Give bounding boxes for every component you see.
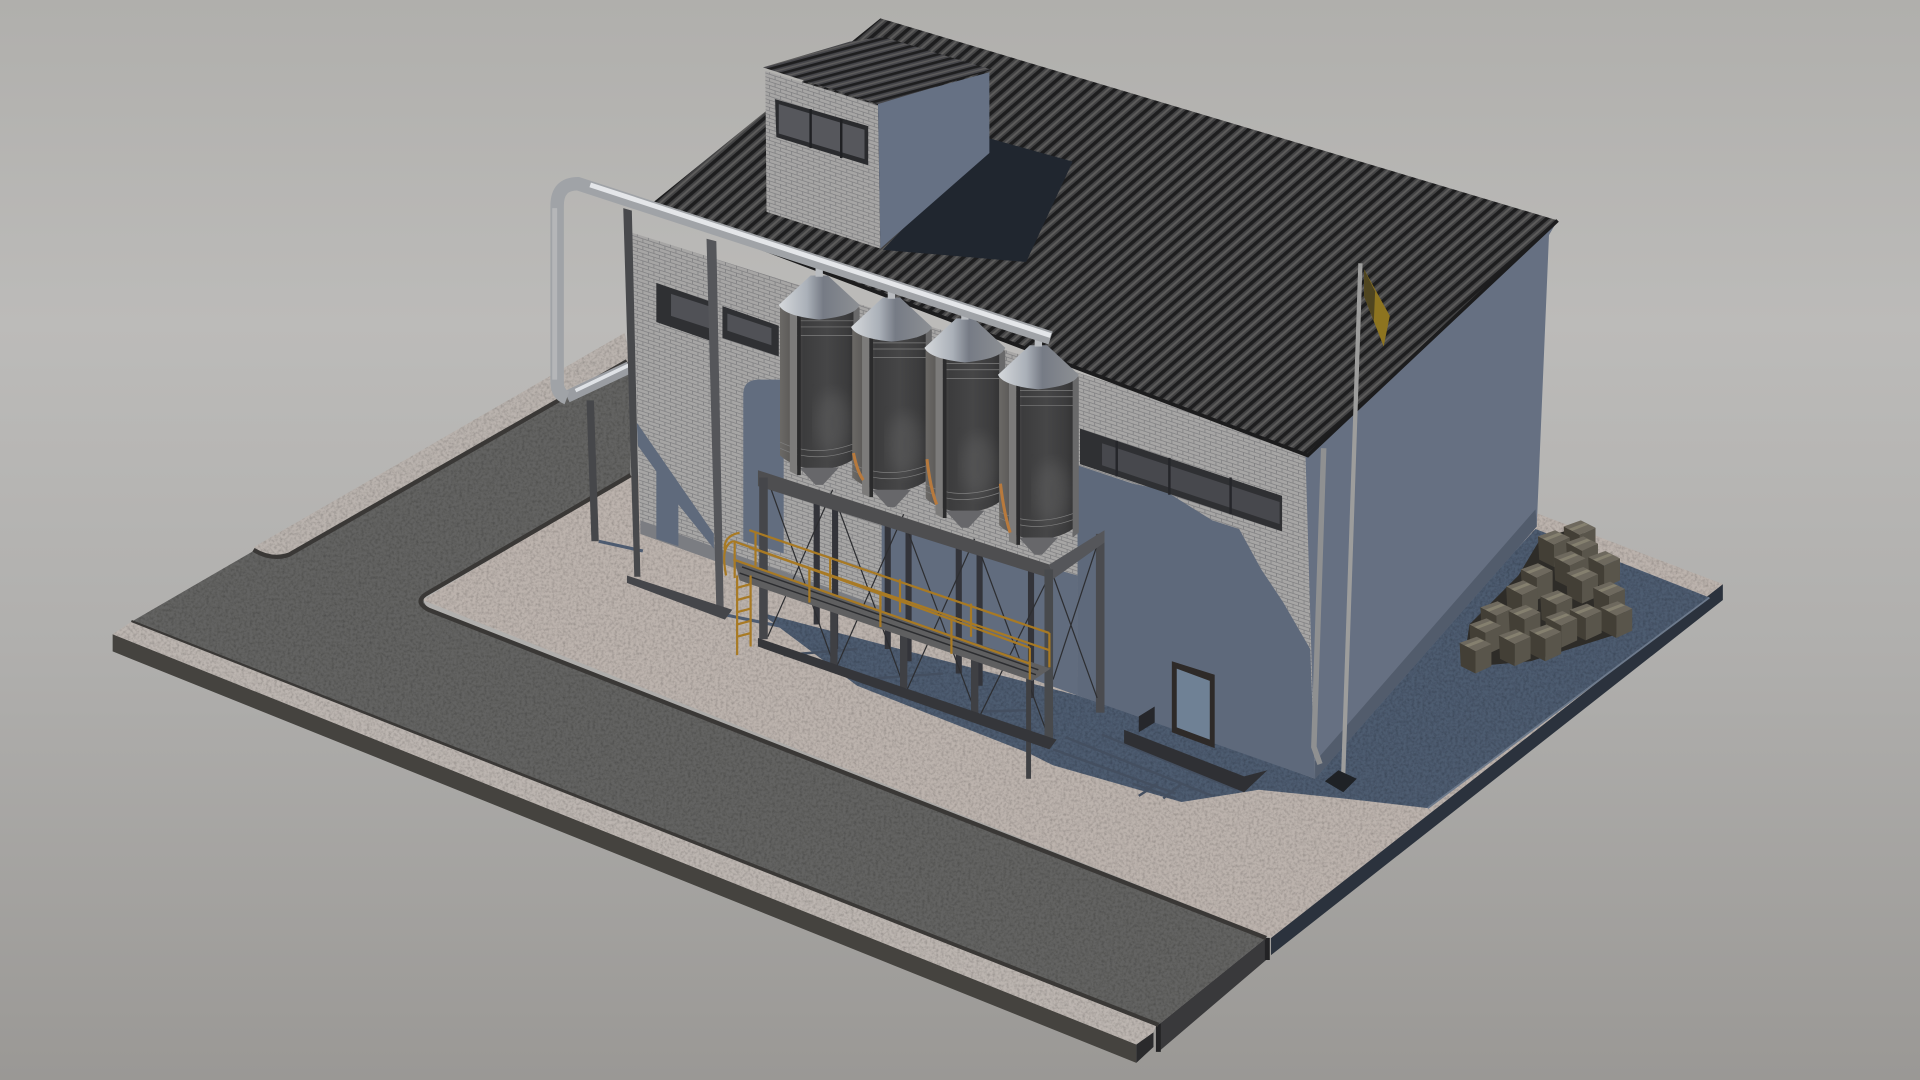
- entrance block: [1139, 707, 1155, 732]
- pipe highlight: [590, 185, 1051, 336]
- silo 1: [779, 266, 860, 485]
- steel frame back: [623, 208, 1104, 740]
- flag fold: [1364, 269, 1375, 321]
- right column: [1096, 534, 1104, 713]
- windows left: [656, 283, 716, 343]
- roof surface: [649, 18, 1558, 456]
- free-standing pipe post: [587, 400, 599, 541]
- ground platform: [113, 333, 1723, 1063]
- brick front wall: [632, 233, 1318, 779]
- platform left side face: [113, 634, 1136, 1063]
- dormer roof: [763, 37, 992, 104]
- wall shadow: diagonal post: [637, 422, 714, 549]
- back rail: [749, 530, 1049, 650]
- silo 4 glow: [1000, 484, 1010, 533]
- wall shadow: silos: [743, 380, 784, 553]
- building shadow on the ground: [759, 529, 1709, 808]
- roof: [649, 18, 1558, 456]
- lot right side face: [1271, 584, 1723, 955]
- post shadow on ground: [599, 541, 784, 627]
- silo 3: [924, 309, 1005, 528]
- right lot edge highlight: [1428, 598, 1709, 808]
- ground beam: [758, 638, 1057, 749]
- front columns: [759, 478, 768, 639]
- gable side wall: [1305, 220, 1558, 779]
- railing posts: [735, 533, 1049, 680]
- top beam: [758, 470, 1053, 579]
- road end face: [1158, 938, 1266, 1052]
- diagonal braces: [768, 480, 1097, 740]
- yellow railing and ladder: [724, 530, 1049, 680]
- dormer side face: [878, 72, 989, 249]
- walkway slats: [740, 567, 1038, 675]
- platform sidewalk end face: [1136, 1032, 1153, 1063]
- curb end posts: [1158, 938, 1267, 1052]
- silos: [779, 266, 1079, 555]
- lower pipe elbow behind wall: [567, 367, 629, 397]
- wall posts: [623, 208, 640, 577]
- ladder cage: [724, 533, 740, 576]
- overhead pipe vertical: [557, 184, 1051, 398]
- vertical pipe highlight: [553, 208, 557, 380]
- gable plinth: [1315, 509, 1537, 779]
- back concrete strip: [253, 333, 632, 557]
- pole base: [1325, 770, 1357, 792]
- windows middle: [722, 306, 779, 356]
- silo 3 glow: [927, 459, 937, 504]
- roof edges: [649, 206, 1558, 456]
- walkway: [735, 561, 1051, 681]
- front sidewalk strip: [113, 622, 1156, 1044]
- steel frame front: [735, 470, 1057, 779]
- pole: [1343, 263, 1360, 774]
- dormer shadow on roof: [883, 138, 1073, 262]
- road curbs: [131, 361, 1266, 1025]
- silo 2 glow: [853, 453, 863, 480]
- dormer window: [775, 99, 868, 165]
- silo 2: [851, 288, 932, 507]
- frame shadow stripes: [784, 649, 1237, 798]
- left support columns: [567, 365, 629, 541]
- concrete lot: [422, 475, 1723, 938]
- wall plinth: [640, 520, 1315, 779]
- flagpole: [1325, 263, 1390, 792]
- dormer brick face: [765, 71, 880, 249]
- building: [632, 220, 1558, 792]
- front rails: [733, 541, 1030, 664]
- road surface: [131, 361, 1266, 1025]
- flag: [1364, 269, 1390, 347]
- frame top right beam: [1049, 530, 1104, 579]
- entrance stairs: [1124, 730, 1267, 792]
- back frame columns: [817, 490, 1031, 698]
- ladder: [737, 576, 751, 655]
- cardboard boxes pile: [1460, 520, 1632, 673]
- lower pipe highlight: [576, 365, 629, 391]
- pile shadow underlay: [1463, 527, 1629, 667]
- windows right: [1080, 429, 1282, 531]
- dormer: [763, 37, 992, 249]
- door: [1172, 661, 1215, 748]
- wall shadow: lower frame: [882, 520, 1078, 696]
- post base beam: [627, 576, 732, 620]
- downpipe: [1314, 448, 1324, 764]
- silo 4: [998, 336, 1079, 555]
- wall shadow: roof overhang: [1078, 465, 1315, 779]
